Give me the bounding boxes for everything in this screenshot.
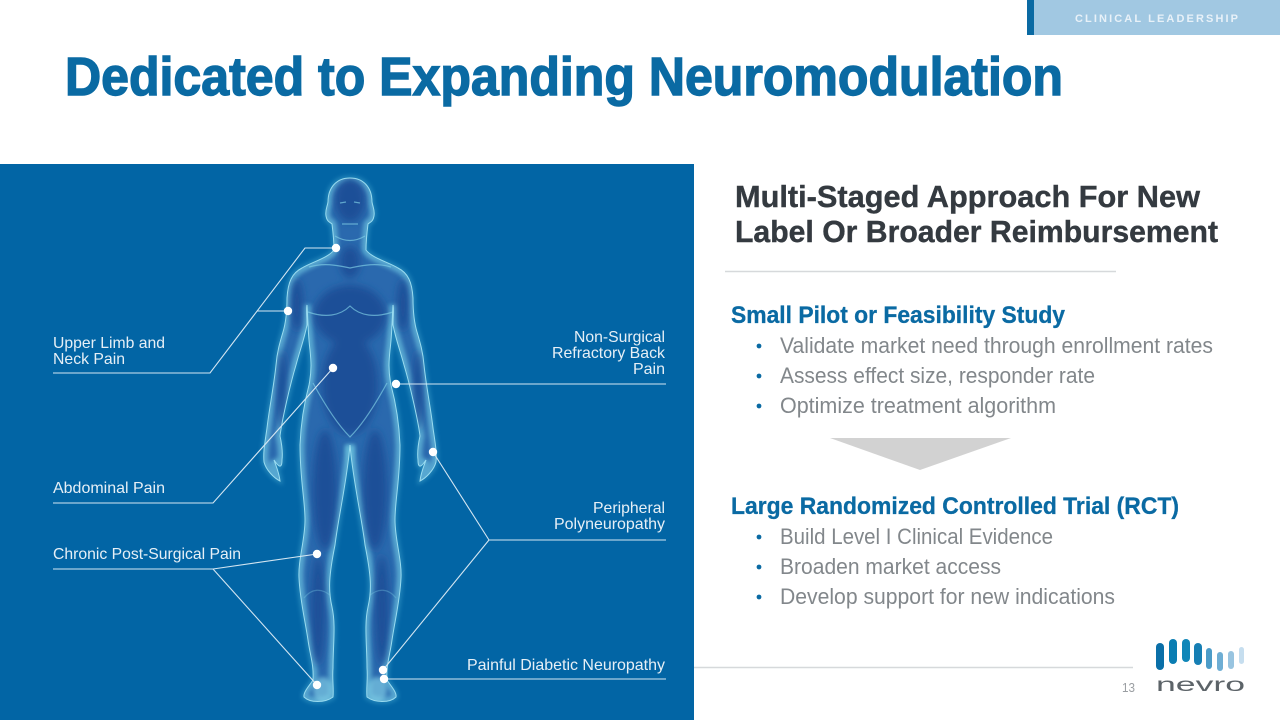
heading: multi-staged approach: [735, 179, 1218, 249]
header tab: clinical leadership: CLINICAL LEADERSHIP: [1075, 13, 1238, 25]
label: chronic post-surgical pain: [53, 546, 321, 689]
label: peripheral polyneuropathy: Peripheral: [593, 500, 665, 517]
section: large randomized controlled trial: [731, 493, 1179, 609]
section: large randomized controlled trial: Develop support for new indications: [780, 584, 1115, 609]
label: non-surgical refractory back pain: Pain: [633, 361, 665, 378]
logo: nevro: [1156, 639, 1245, 696]
label: upper limb and neck pain: [53, 244, 340, 373]
section: large randomized controlled trial: Build Level I Clinical Evidence: [780, 524, 1053, 549]
label: non-surgical refractory back pain: Non-Surgical: [574, 329, 665, 346]
title: Dedicated to Expanding Neuromodulation: [65, 47, 1063, 107]
label: upper limb and neck pain: Neck Pain: [53, 351, 125, 368]
section: small pilot or feasibility study: Small Pilot or Feasibility Study: [731, 302, 1066, 329]
heading: multi-staged approach: Label Or Broader Reimbursement: [735, 214, 1218, 249]
logo: nevro: nevro: [1156, 675, 1245, 696]
arrow: down chevron: [830, 438, 1011, 470]
label: painful diabetic neuropathy: [380, 657, 666, 683]
illustration: human body: [255, 170, 445, 710]
section: small pilot or feasibility study: [731, 302, 1213, 418]
label: peripheral polyneuropathy: [379, 448, 666, 674]
heading: multi-staged approach: Multi-Staged Approach For New: [735, 179, 1201, 214]
label: upper limb and neck pain: Upper Limb and: [53, 335, 165, 352]
label: abdominal pain: [53, 364, 337, 503]
label: chronic post-surgical pain: Chronic Post-Surgical Pain: [53, 546, 241, 563]
label: painful diabetic neuropathy: Painful Diabetic Neuropathy: [467, 657, 665, 674]
page number: 13: [1122, 680, 1135, 695]
section: small pilot or feasibility study: Validate market need through enrollment rates: [780, 333, 1213, 358]
label: abdominal pain: Abdominal Pain: [53, 480, 165, 497]
label: non-surgical refractory back pain: [392, 329, 666, 388]
label: peripheral polyneuropathy: Polyneuropathy: [554, 516, 665, 533]
section: large randomized controlled trial: Large Randomized Controlled Trial (RCT): [731, 493, 1179, 520]
section: small pilot or feasibility study: Optimize treatment algorithm: [780, 393, 1056, 418]
header tab: clinical leadership: [1027, 0, 1280, 35]
panel: body map: [0, 164, 694, 720]
label: non-surgical refractory back pain: Refractory Back: [552, 345, 666, 362]
section: small pilot or feasibility study: Assess effect size, responder rate: [780, 363, 1095, 388]
section: large randomized controlled trial: Broaden market access: [780, 554, 1001, 579]
